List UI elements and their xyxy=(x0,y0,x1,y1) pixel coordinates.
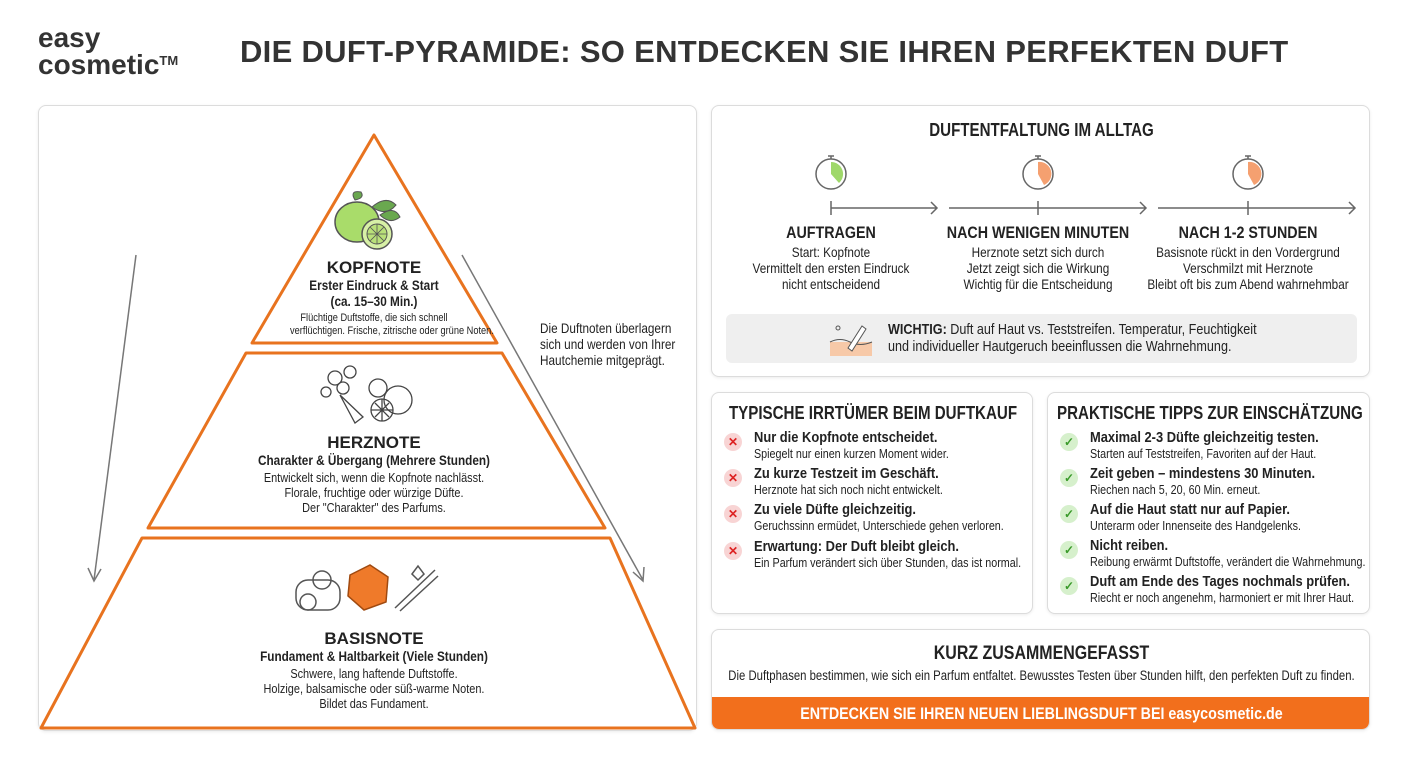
panel: tipps: Zeit geben – mindestens 30 Minuten. xyxy=(1090,465,1315,482)
panel: tipps: ✓ xyxy=(1064,543,1074,557)
cta bar: ENTDECKEN SIE IHREN NEUEN LIEBLINGSDUFT BEI easycosmetic.de xyxy=(800,704,1283,723)
item 2 xyxy=(724,465,943,497)
text: herznote: HERZNOTE xyxy=(327,433,421,452)
arrows xyxy=(831,201,1355,215)
side note: Hautchemie mitgeprägt. xyxy=(540,352,665,368)
panel: irrtümer: Spiegelt nur einen kurzen Moment wider. xyxy=(754,447,949,461)
text: herznote: Der "Charakter" des Parfums. xyxy=(302,500,446,515)
icon: citrus xyxy=(335,192,400,249)
item 1 xyxy=(724,429,949,461)
step 3 xyxy=(1147,223,1349,292)
panel: tipps: Maximal 2-3 Düfte gleichzeitig testen. xyxy=(1090,429,1319,446)
heading: DUFTENTFALTUNG IM ALLTAG xyxy=(929,120,1154,140)
step 1: Vermittelt den ersten Eindruck xyxy=(753,260,909,276)
panel: tipps: Auf die Haut statt nur auf Papier. xyxy=(1090,501,1290,518)
panel: irrtümer: ✕ xyxy=(728,507,738,521)
side note: Die Duftnoten überlagern xyxy=(540,320,671,336)
text: herznote: Entwickelt sich, wenn die Kopfnote nachlässt. xyxy=(264,470,484,485)
panel: irrtümer: Herznote hat sich noch nicht entwickelt. xyxy=(754,483,943,497)
tip 4 xyxy=(1060,537,1365,569)
panel: irrtümer: ✕ xyxy=(728,471,738,485)
text: kopfnote: verflüchtigen. Frische, zitrische oder grüne Noten. xyxy=(290,325,494,337)
heading: PRAKTISCHE TIPPS ZUR EINSCHÄTZUNG xyxy=(1057,403,1363,423)
item 4 xyxy=(724,538,1021,570)
text: basisnote: Schwere, lang haftende Duftstoffe. xyxy=(290,666,458,681)
panel: tipps: Nicht reiben. xyxy=(1090,537,1168,554)
side note: sich und werden von Ihrer xyxy=(540,336,675,352)
text: herznote: Charakter & Übergang (Mehrere Stunden) xyxy=(258,452,490,468)
icon: wood amber vanilla xyxy=(296,565,438,611)
text: kopfnote xyxy=(290,258,494,337)
tip 3 xyxy=(1060,501,1301,533)
panel: tipps: Duft am Ende des Tages nochmals prüfen. xyxy=(1090,573,1350,590)
logo: cosmeticTM xyxy=(38,49,178,80)
panel: irrtümer: Geruchssinn ermüdet, Unterschiede gehen verloren. xyxy=(754,519,1004,533)
step 1 xyxy=(752,223,910,292)
heading: KURZ ZUSAMMENGEFASST xyxy=(934,643,1149,664)
panel: tipps: Unterarm oder Innenseite des Handgelenks. xyxy=(1090,519,1301,533)
panel: pyramid xyxy=(38,105,697,731)
tip 2 xyxy=(1060,465,1315,497)
step 2 xyxy=(947,223,1129,292)
text: basisnote: Fundament & Haltbarkeit (Viele Stunden) xyxy=(260,648,488,664)
panel: irrtümer: Ein Parfum verändert sich über Stunden, das ist normal. xyxy=(754,556,1021,570)
step 1: nicht entscheidend xyxy=(782,276,880,292)
panel: irrtümer: Nur die Kopfnote entscheidet. xyxy=(754,429,937,446)
panel: summary xyxy=(711,629,1370,730)
text: herznote xyxy=(258,433,490,515)
panel: irrtümer: Erwartung: Der Duft bleibt gleich. xyxy=(754,538,959,555)
panel: tipps: ✓ xyxy=(1064,435,1074,449)
callout: wichtig: und individueller Hautgeruch beeinflussen die Wahrnehmung. xyxy=(888,338,1231,355)
panel: tipps: Reibung erwärmt Duftstoffe, verändert die Wahrnehmung. xyxy=(1090,555,1365,569)
text: basisnote: Holzige, balsamische oder süß-warme Noten. xyxy=(264,681,484,696)
text: kopfnote: Flüchtige Duftstoffe, die sich schnell xyxy=(300,312,448,324)
text: basisnote: BASISNOTE xyxy=(324,629,424,648)
panel: tipps: ✓ xyxy=(1064,507,1074,521)
step 3: Bleibt oft bis zum Abend wahrnehmbar xyxy=(1147,276,1349,292)
panel: tipps: Riechen nach 5, 20, 60 Min. erneut. xyxy=(1090,483,1260,497)
panel: tipps: Riecht er noch angenehm, harmoniert er mit Ihrer Haut. xyxy=(1090,591,1354,605)
heading: TYPISCHE IRRTÜMER BEIM DUFTKAUF xyxy=(729,403,1017,423)
callout: wichtig xyxy=(726,314,1357,363)
step 3: NACH 1-2 STUNDEN xyxy=(1179,223,1317,242)
logo: easy xyxy=(38,22,100,53)
arrows xyxy=(88,255,644,581)
step 2: Jetzt zeigt sich die Wirkung xyxy=(967,260,1109,276)
summary text: Die Duftphasen bestimmen, wie sich ein Parfum entfaltet. Bewusstes Testen über Stunden hilft, den perfekten Duft zu finden. xyxy=(728,668,1355,683)
panel: irrtümer: Zu kurze Testzeit im Geschäft. xyxy=(754,465,939,482)
step 1: AUFTRAGEN xyxy=(786,223,876,242)
icon: flowers and fruit xyxy=(321,366,412,423)
panel: tipps: ✓ xyxy=(1064,471,1074,485)
panel: irrtümer xyxy=(711,392,1033,614)
step 2: Wichtig für die Entscheidung xyxy=(963,276,1113,292)
logo xyxy=(38,22,178,80)
panel: tipps: Starten auf Teststreifen, Favoriten auf der Haut. xyxy=(1090,447,1316,461)
text: kopfnote: (ca. 15–30 Min.) xyxy=(331,293,417,309)
timers xyxy=(816,156,1263,189)
panel: tipps: ✓ xyxy=(1064,579,1074,593)
text: basisnote: Bildet das Fundament. xyxy=(319,696,429,711)
text: basisnote xyxy=(260,629,488,711)
step 3: Verschmilzt mit Herznote xyxy=(1183,260,1313,276)
panel: irrtümer: ✕ xyxy=(728,435,738,449)
step 2: Herznote setzt sich durch xyxy=(972,244,1104,260)
step 1: Start: Kopfnote xyxy=(792,244,870,260)
tip 5 xyxy=(1060,573,1354,605)
panel: timeline xyxy=(711,105,1370,377)
step 2: NACH WENIGEN MINUTEN xyxy=(947,223,1129,242)
text: kopfnote: KOPFNOTE xyxy=(327,258,421,277)
step 3: Basisnote rückt in den Vordergrund xyxy=(1156,244,1340,260)
callout: wichtig: WICHTIG: Duft auf Haut vs. Teststreifen. Temperatur, Feuchtigkeit xyxy=(888,321,1257,338)
item 3 xyxy=(724,501,1004,533)
pyramid outlines xyxy=(41,135,695,728)
side note xyxy=(540,320,676,368)
panel: irrtümer: Zu viele Düfte gleichzeitig. xyxy=(754,501,916,518)
text: herznote: Florale, fruchtige oder würzige Düfte. xyxy=(284,485,464,500)
tip 1 xyxy=(1060,429,1319,461)
title: DIE DUFT-PYRAMIDE: SO ENTDECKEN SIE IHREN PERFEKTEN DUFT xyxy=(240,34,1288,69)
panel: tipps xyxy=(1047,392,1370,614)
panel: irrtümer: ✕ xyxy=(728,544,738,558)
text: kopfnote: Erster Eindruck & Start xyxy=(309,277,439,293)
cta bar xyxy=(712,697,1371,731)
